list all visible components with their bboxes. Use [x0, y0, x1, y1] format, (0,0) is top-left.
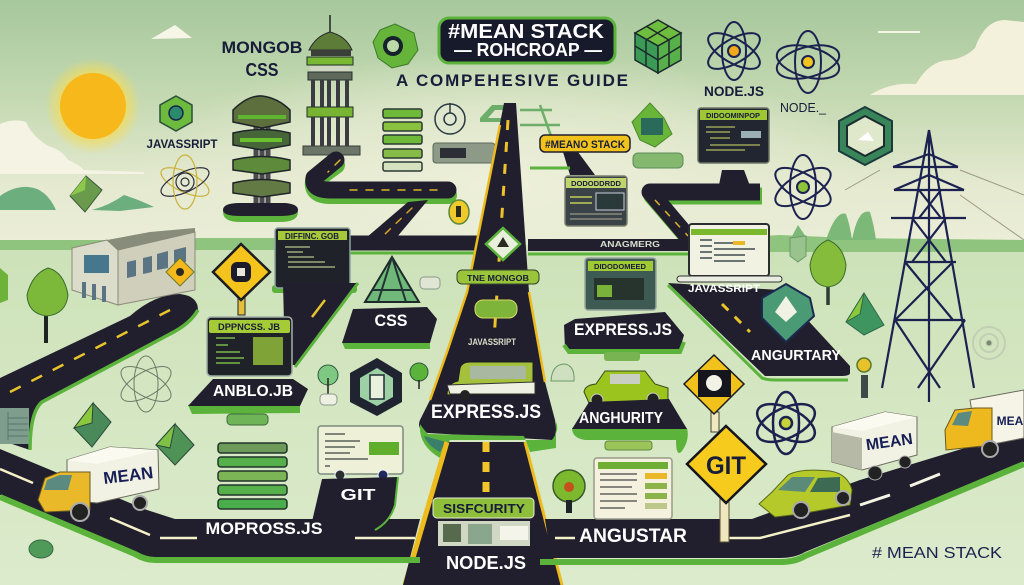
icon: atom top 2 — [773, 31, 843, 93]
pill: mongo road: TNE MONGOB — [467, 273, 529, 283]
tower columns lower — [313, 117, 347, 146]
yellow sign mean stack — [540, 135, 630, 152]
main road upper — [419, 103, 557, 458]
platform: express — [564, 312, 684, 361]
sign: upper diamond — [684, 355, 744, 414]
small pill — [605, 441, 652, 450]
laptop panel top left — [272, 228, 357, 293]
title line 2: — ROHCROAP — — [454, 40, 602, 60]
tower band upper — [307, 57, 353, 65]
icon: green pin — [410, 363, 428, 389]
icon: crystal b — [156, 424, 194, 465]
cab — [38, 472, 90, 512]
label: moposs: MOPROSS.JS — [206, 519, 322, 538]
green ladder left — [480, 105, 506, 122]
truck yellow far right: MEA — [997, 414, 1024, 428]
doc: angustar — [594, 458, 672, 519]
platform: anblo — [188, 379, 308, 425]
panel header — [209, 320, 290, 333]
icon: crystal a — [74, 403, 111, 447]
sign: oval on road — [475, 300, 517, 318]
label: Node.js: NODE.JS — [704, 83, 764, 99]
icon: pale shield — [790, 236, 806, 262]
icon: pin — [318, 365, 338, 405]
icon: crystal left — [70, 176, 102, 212]
power pylon — [882, 130, 974, 402]
small pill — [227, 414, 268, 425]
green fold — [420, 422, 557, 458]
road: upper branch right — [520, 105, 595, 175]
road: left curved — [0, 294, 198, 450]
icon: dome — [551, 364, 574, 381]
icon: atom lower — [752, 392, 820, 454]
platform: CSS: CSS — [374, 311, 408, 330]
icon: hex badge — [350, 358, 402, 416]
garage — [0, 408, 29, 444]
road: angurtary — [668, 283, 850, 380]
diagonal road to laptop — [283, 283, 358, 367]
icon: small diamond sign — [166, 258, 194, 286]
icon: crystal right — [846, 293, 884, 335]
icon: green badge — [632, 103, 672, 147]
label: express road: EXPRESS.JS — [431, 402, 541, 423]
icon: atom left — [157, 155, 213, 209]
tower band lower — [307, 107, 353, 117]
icon: atom mid right — [770, 155, 836, 219]
tree left — [0, 268, 68, 343]
platform: angurity: ANGHURITY — [579, 410, 663, 427]
sign: git — [687, 426, 766, 503]
label: JavaScript: JAVASSRIPT — [146, 137, 218, 151]
icon: atom faint — [116, 356, 176, 412]
laptop right — [677, 224, 782, 282]
truck yellow far right — [945, 390, 1024, 457]
security box — [433, 498, 534, 546]
connector diagonal — [367, 200, 428, 237]
road: right branch — [528, 170, 762, 254]
truck mean right: MEAN — [865, 431, 914, 454]
icon: diamond road sign — [486, 228, 520, 260]
background sky — [0, 0, 1024, 245]
right cloud — [870, 20, 1024, 95]
road label javascript: JAVASSRIPT — [688, 283, 760, 295]
stacked tower — [223, 96, 298, 222]
server list moposs — [218, 443, 287, 509]
building — [72, 228, 195, 305]
icon: hex javascript — [160, 96, 192, 131]
car green — [584, 371, 668, 406]
icon: cube — [635, 20, 681, 73]
small cloud — [151, 25, 192, 39]
green oddments — [633, 153, 683, 168]
tower base — [303, 146, 360, 155]
ground — [0, 245, 1024, 585]
stack disc 3 — [233, 156, 290, 174]
small pill — [604, 352, 640, 361]
platform: angurity — [572, 399, 688, 453]
mini server stack — [383, 109, 422, 171]
tall tower — [303, 15, 360, 155]
sun — [45, 58, 141, 154]
icon: eye badge — [373, 24, 418, 68]
doc: git — [318, 426, 403, 480]
subtitle: A COMPEHESIVE GUIDE — [396, 71, 628, 90]
icon: small green pin — [553, 470, 585, 513]
platform: anblo: ANBLO.JB — [213, 383, 293, 400]
panel: laptop anblo — [207, 317, 292, 376]
stack disc 4 — [233, 180, 290, 197]
background hills right — [790, 212, 876, 240]
junction label: ANAGMERG — [600, 240, 660, 249]
left hills — [0, 187, 154, 211]
truck left: MEAN — [102, 463, 154, 488]
label: node.js road: NODE.JS — [446, 553, 526, 573]
car yellow-green — [759, 470, 852, 518]
stack dome — [233, 96, 290, 128]
label: angustar: ANGUSTAR — [579, 526, 687, 547]
bottom road — [0, 430, 1024, 585]
truck left — [38, 447, 159, 521]
panel: laptop anblo: DPPNCSS. JB — [218, 322, 281, 332]
grey device left of road — [433, 143, 495, 163]
cargo — [67, 447, 159, 503]
centre dashes — [494, 120, 508, 340]
pill: mongo road — [457, 270, 539, 284]
icon: big diamond sign — [213, 244, 270, 315]
panel: middle — [565, 176, 627, 226]
laptop panel top left: DIFFINC. GOB — [285, 232, 339, 241]
label: Node: NODE._ — [780, 100, 827, 115]
platform: CSS — [342, 307, 437, 349]
road: git stub — [310, 477, 398, 530]
panel: upper right — [698, 108, 769, 163]
footer tag: # MEAN STACK — [872, 545, 1002, 562]
sign: git: GIT — [706, 452, 746, 480]
icon: green triangle — [365, 257, 419, 302]
label: javascript road: JAVASSRIPT — [468, 337, 516, 347]
horizon band — [0, 235, 1024, 252]
icon: atom top 1 — [703, 22, 765, 80]
truck mean right — [832, 412, 917, 480]
icon: ring badge — [435, 103, 465, 134]
panel: express laptop — [585, 258, 656, 310]
small grey doodad — [420, 277, 440, 289]
security box: SISFCURITY — [443, 501, 525, 516]
road edge lines — [430, 125, 500, 400]
panel: middle: DODODDRDD — [571, 181, 621, 188]
yellow sign mean stack: #MEANO STACK — [545, 139, 625, 151]
horizontal junction road — [350, 236, 480, 250]
sky pale glow — [120, 50, 880, 320]
icon: hex shield — [839, 107, 892, 165]
person icon — [857, 358, 871, 398]
sign: post git — [720, 498, 729, 542]
thin cloud — [878, 31, 920, 33]
label: MongoDB: MONGOB — [222, 38, 302, 57]
panel header — [278, 231, 347, 240]
panel: express laptop: DIDODOMEED — [594, 262, 647, 271]
road label angurtary: ANGURTARY — [751, 347, 841, 364]
horizontal right junction — [528, 239, 690, 251]
tree right — [810, 240, 846, 305]
title banner — [439, 18, 615, 63]
power line hill — [845, 170, 1024, 240]
label: CSS: CSS — [246, 60, 278, 80]
platform: express: EXPRESS.JS — [574, 320, 672, 339]
sign: post — [711, 412, 719, 432]
stack disc 2 — [233, 130, 290, 150]
main road lower — [403, 442, 563, 585]
icon: pale ring — [973, 327, 1005, 359]
panel: upper right: DIDOOMINPOP — [706, 111, 760, 120]
tower columns upper — [313, 80, 347, 107]
road: tower road — [314, 160, 480, 253]
icon: gem shield — [762, 284, 814, 342]
left cloud — [0, 120, 144, 174]
stack base — [223, 203, 298, 222]
white car — [447, 362, 535, 400]
icon: road marker — [29, 540, 53, 558]
road: git stub: GIT — [340, 487, 376, 504]
tower dome — [309, 32, 352, 50]
title line 1: #MEAN STACK — [448, 21, 605, 43]
small dot sign — [449, 200, 469, 224]
